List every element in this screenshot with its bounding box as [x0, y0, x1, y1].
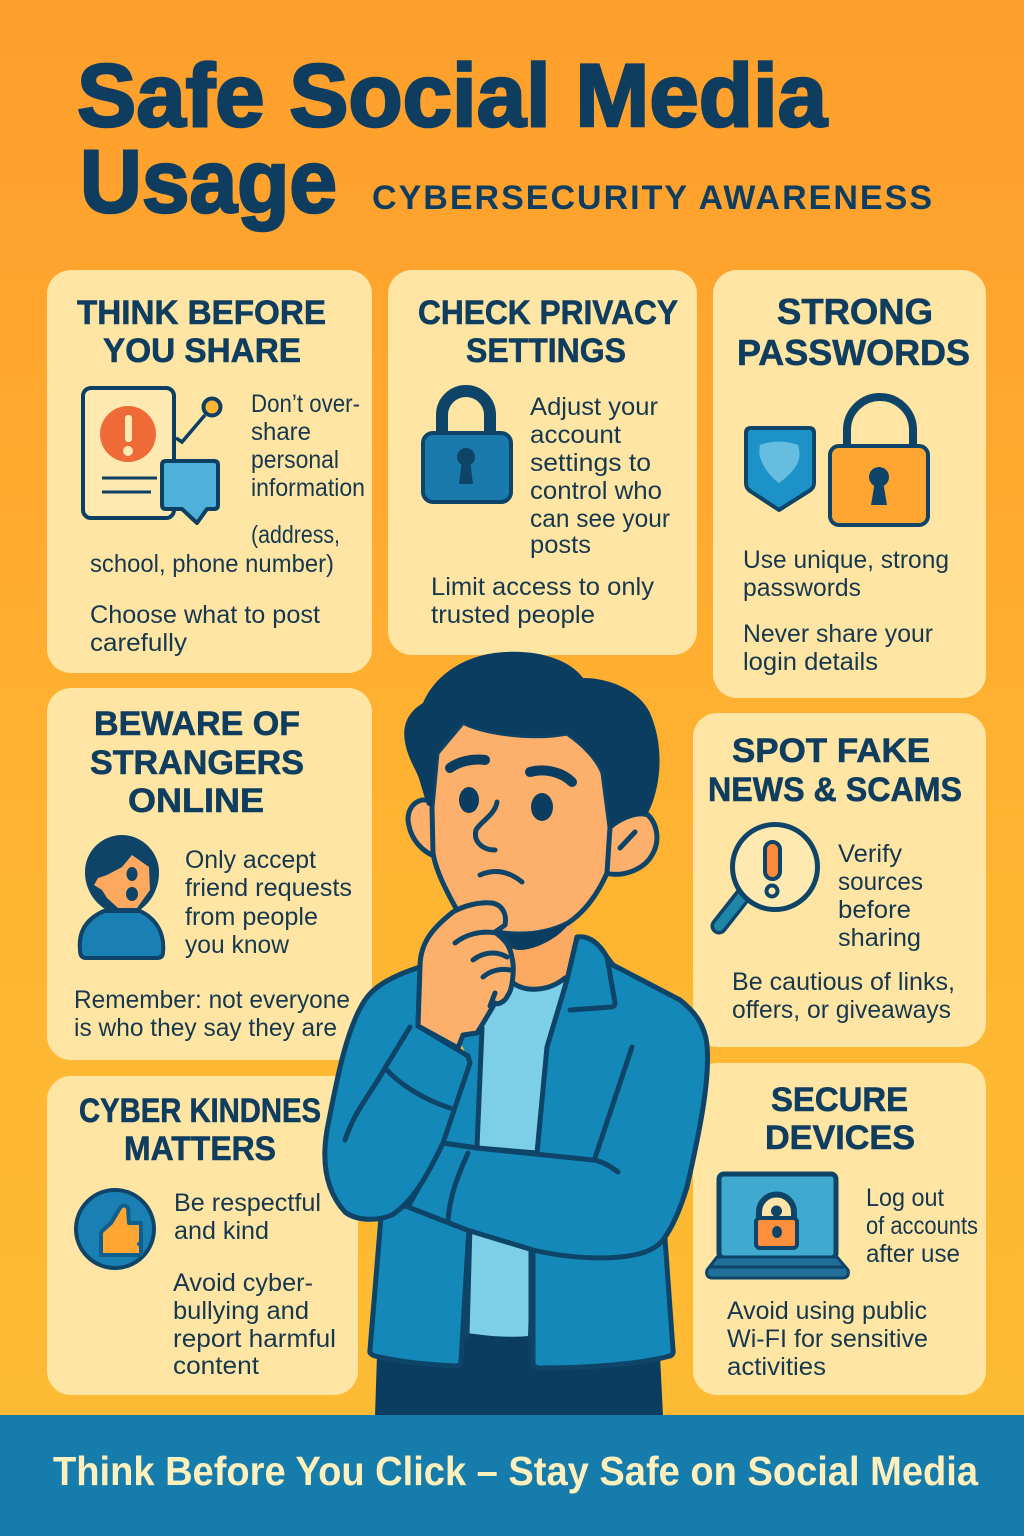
- text: strong passwords: Use unique, strong: [743, 546, 949, 574]
- text: secure devices: after use: [866, 1240, 960, 1268]
- text: strong passwords: Never share your: [743, 620, 933, 648]
- text: cyber kindness matters: Be respectful: [174, 1189, 321, 1217]
- text: secure devices: Log out: [866, 1184, 944, 1212]
- text: strong passwords: login details: [743, 648, 878, 676]
- text: cyber kindness matters: bullying and: [173, 1297, 309, 1325]
- heading: think before you share: [77, 294, 326, 370]
- title: Safe Social Media: [77, 45, 828, 145]
- footer banner: Think Before You Click – Stay Safe on Social Media: [53, 1448, 979, 1494]
- heading: beware of strangers online: ONLINE: [128, 782, 264, 820]
- illustration: thinking person: [325, 652, 708, 1416]
- text: think before you share: (address,: [251, 521, 340, 549]
- heading: cyber kindness matters: [79, 1092, 321, 1168]
- text: secure devices: Avoid using public: [727, 1297, 927, 1325]
- text: check privacy settings: posts: [530, 531, 591, 559]
- text: spot fake news and scams: sources: [838, 868, 923, 896]
- title: [77, 45, 828, 231]
- text: think before you share: Choose what to post: [90, 601, 320, 629]
- title: Usage: [80, 131, 337, 231]
- panel: spot fake news and scams: [693, 713, 986, 1047]
- text: think before you share: carefully: [90, 629, 188, 657]
- text: spot fake news and scams: Verify: [838, 840, 903, 868]
- icon: person: [80, 835, 163, 958]
- heading: check privacy settings: [418, 294, 678, 370]
- text: spot fake news and scams: Be cautious of links,: [732, 968, 955, 996]
- text: cyber kindness matters: content: [173, 1352, 259, 1380]
- heading: think before you share: YOU SHARE: [103, 332, 301, 370]
- text: beware of strangers online: from people: [185, 903, 318, 931]
- subtitle: CYBERSECURITY AWARENESS: [372, 179, 932, 217]
- icon: document with alert and chat bubble: [83, 388, 220, 523]
- heading: spot fake news and scams: NEWS & SCAMS: [708, 771, 962, 809]
- heading: cyber kindness matters: MATTERS: [124, 1130, 276, 1168]
- text: beware of strangers online: friend requests: [185, 874, 352, 902]
- text: beware of strangers online: Only accept: [185, 846, 316, 874]
- heading: check privacy settings: CHECK PRIVACY: [418, 294, 678, 332]
- text: beware of strangers online: Remember: not everyone: [74, 986, 350, 1014]
- heading: strong passwords: PASSWORDS: [737, 332, 970, 373]
- heading: check privacy settings: SETTINGS: [466, 332, 626, 370]
- text: check privacy settings: trusted people: [431, 601, 595, 629]
- panel: think before you share: [47, 270, 372, 673]
- icon: shield and orange padlock: [746, 397, 928, 525]
- heading: cyber kindness matters: CYBER KINDNES: [79, 1092, 321, 1130]
- text: check privacy settings: can see your: [530, 505, 670, 533]
- text: think before you share: school, phone number): [90, 550, 334, 578]
- text: beware of strangers online: is who they say they are: [74, 1014, 337, 1042]
- heading: beware of strangers online: [90, 705, 304, 820]
- text: secure devices: activities: [727, 1353, 826, 1381]
- text: think before you share: Don’t over-: [251, 390, 360, 418]
- text: check privacy settings: Limit access to only: [431, 573, 655, 601]
- text: spot fake news and scams: offers, or giveaways: [732, 996, 951, 1024]
- heading: secure devices: SECURE: [771, 1081, 908, 1119]
- heading: beware of strangers online: BEWARE OF: [94, 705, 300, 743]
- icon: laptop with padlock: [707, 1174, 848, 1278]
- text: spot fake news and scams: before: [838, 896, 911, 924]
- text: strong passwords: passwords: [743, 574, 861, 602]
- text: strong passwords: [743, 546, 949, 676]
- text: think before you share: information: [251, 474, 365, 502]
- heading: strong passwords: [737, 291, 970, 373]
- heading: beware of strangers online: STRANGERS: [90, 744, 304, 782]
- text: cyber kindness matters: and kind: [174, 1217, 269, 1245]
- text: think before you share: personal: [251, 446, 339, 474]
- text: think before you share: [90, 390, 365, 657]
- text: spot fake news and scams: sharing: [838, 924, 921, 952]
- heading: spot fake news and scams: SPOT FAKE: [732, 732, 930, 770]
- icon: thumbs up: [76, 1190, 154, 1268]
- footer banner: [0, 1415, 1024, 1536]
- text: secure devices: [727, 1184, 978, 1381]
- panel: cyber kindness matters: [47, 1076, 358, 1395]
- text: think before you share: share: [251, 418, 311, 446]
- text: check privacy settings: settings to: [530, 449, 651, 477]
- text: cyber kindness matters: Avoid cyber-: [173, 1269, 313, 1297]
- text: beware of strangers online: [74, 846, 352, 1042]
- panel: strong passwords: [713, 270, 986, 698]
- panel: secure devices: [693, 1063, 986, 1395]
- text: spot fake news and scams: [732, 840, 955, 1024]
- icon: magnifying glass with alert: [719, 824, 818, 926]
- text: secure devices: Wi-FI for sensitive: [727, 1325, 928, 1353]
- text: secure devices: of accounts: [866, 1212, 978, 1240]
- heading: secure devices: [765, 1081, 915, 1157]
- heading: strong passwords: STRONG: [777, 291, 933, 332]
- heading: spot fake news and scams: [708, 732, 962, 809]
- text: check privacy settings: Adjust your: [530, 393, 658, 421]
- icon: blue padlock: [423, 391, 511, 502]
- heading: think before you share: THINK BEFORE: [77, 294, 326, 332]
- text: cyber kindness matters: report harmful: [173, 1325, 336, 1353]
- text: beware of strangers online: you know: [185, 931, 290, 959]
- panel: beware of strangers online: [47, 688, 372, 1060]
- text: check privacy settings: account: [530, 421, 621, 449]
- text: check privacy settings: [431, 393, 670, 629]
- heading: secure devices: DEVICES: [765, 1119, 915, 1157]
- text: cyber kindness matters: [173, 1189, 336, 1380]
- text: check privacy settings: control who: [530, 477, 662, 505]
- panel: check privacy settings: [388, 270, 697, 655]
